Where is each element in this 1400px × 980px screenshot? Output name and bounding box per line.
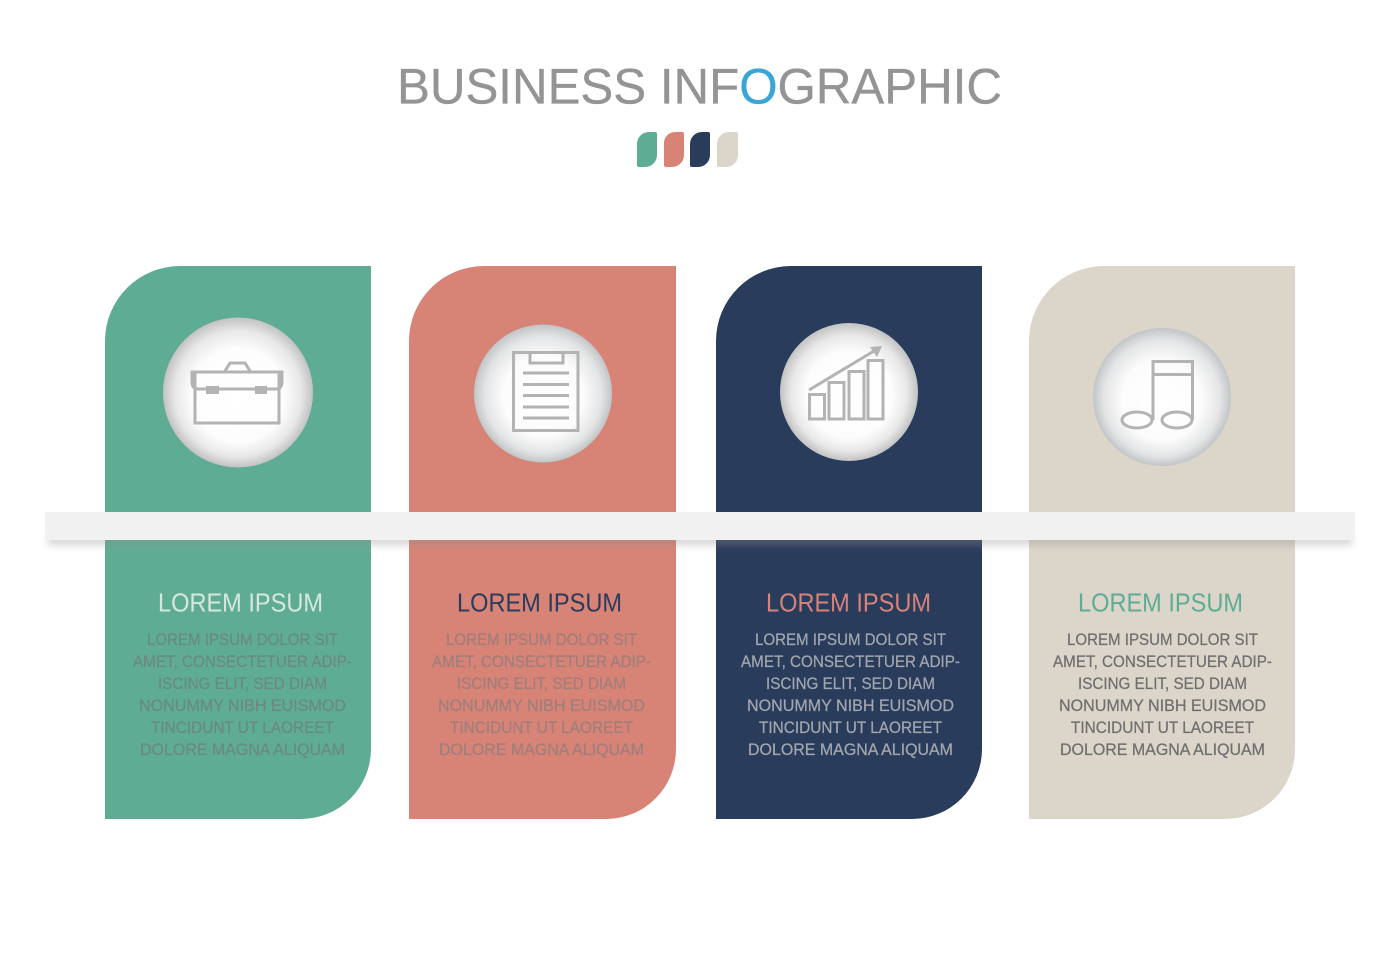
- body text: DOLORE MAGNA ALIQUAM: [140, 740, 345, 759]
- card background: [409, 266, 676, 819]
- heading: LOREM IPSUM: [457, 588, 622, 618]
- body text: DOLORE MAGNA ALIQUAM: [1060, 740, 1265, 759]
- body text: AMET, CONSECTETUER ADIP-: [1053, 652, 1272, 671]
- body text: NONUMMY NIBH EUISMOD: [747, 696, 954, 715]
- panel: card 3: [716, 266, 982, 819]
- card background: [716, 266, 982, 819]
- body text: TINCIDUNT UT LAOREET: [450, 718, 633, 737]
- body text: NONUMMY NIBH EUISMOD: [438, 696, 645, 715]
- body text: NONUMMY NIBH EUISMOD: [1059, 696, 1266, 715]
- body text: AMET, CONSECTETUER ADIP-: [741, 652, 960, 671]
- icon: growth chart: [809, 346, 883, 419]
- panel: card 4: [1029, 266, 1295, 819]
- body text: TINCIDUNT UT LAOREET: [759, 718, 942, 737]
- icon circle: [780, 323, 918, 461]
- card background: [105, 266, 371, 819]
- body text: TINCIDUNT UT LAOREET: [1071, 718, 1254, 737]
- body text: DOLORE MAGNA ALIQUAM: [748, 740, 953, 759]
- body text: DOLORE MAGNA ALIQUAM: [439, 740, 644, 759]
- body text: [133, 630, 352, 759]
- icon circle: [163, 318, 313, 468]
- heading: LOREM IPSUM: [1078, 588, 1243, 618]
- panel: card 1: [105, 266, 371, 819]
- heading: LOREM IPSUM: [766, 588, 931, 618]
- body text: ISCING ELIT, SED DIAM: [457, 674, 626, 693]
- panel: card 2: [409, 266, 676, 819]
- body text: LOREM IPSUM DOLOR SIT: [1067, 630, 1258, 649]
- body text: NONUMMY NIBH EUISMOD: [139, 696, 346, 715]
- body text: LOREM IPSUM DOLOR SIT: [446, 630, 637, 649]
- body text: [1053, 630, 1272, 759]
- card background: [1029, 266, 1295, 819]
- icon: music note: [1122, 362, 1192, 428]
- body text: LOREM IPSUM DOLOR SIT: [755, 630, 946, 649]
- icon circle: [1093, 328, 1231, 466]
- body text: [432, 630, 651, 759]
- body text: LOREM IPSUM DOLOR SIT: [147, 630, 338, 649]
- body text: AMET, CONSECTETUER ADIP-: [133, 652, 352, 671]
- icon: clipboard: [514, 352, 578, 430]
- title: BUSINESS INFOGRAPHIC: [397, 58, 1002, 114]
- horizontal band: [45, 512, 1355, 545]
- body text: ISCING ELIT, SED DIAM: [158, 674, 327, 693]
- heading: LOREM IPSUM: [158, 588, 323, 618]
- body text: [741, 630, 960, 759]
- colour swatches: [637, 132, 738, 167]
- icon circle: [474, 324, 612, 462]
- body text: TINCIDUNT UT LAOREET: [151, 718, 334, 737]
- body text: ISCING ELIT, SED DIAM: [1078, 674, 1247, 693]
- body text: AMET, CONSECTETUER ADIP-: [432, 652, 651, 671]
- icon: briefcase: [192, 363, 282, 423]
- body text: ISCING ELIT, SED DIAM: [766, 674, 935, 693]
